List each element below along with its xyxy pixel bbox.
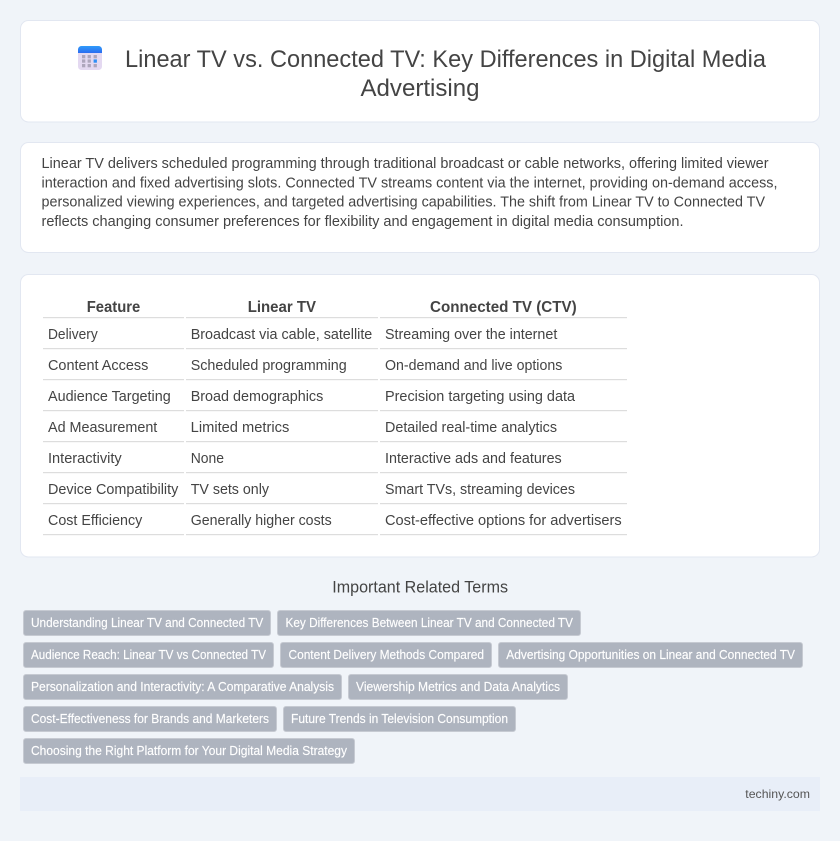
table row: delivery (48, 327, 557, 343)
table header: Feature (87, 299, 140, 316)
text block: introduction paragraph: interaction and fixed advertising slots. Connected TV streams content via the internet, providing on-demand access, (42, 175, 778, 191)
footer: techiny.com (745, 787, 810, 801)
text block: introduction paragraph (42, 156, 778, 230)
table header (87, 299, 577, 316)
tag: choosing platform: Choosing the Right Platform for Your Digital Media Strategy (31, 744, 348, 758)
tag: cost-effectiveness (24, 706, 276, 732)
table row: interactivity (48, 451, 562, 467)
title: Linear TV vs. Connected TV: Key Differences in Digital Media (125, 46, 766, 73)
text block: introduction paragraph: reflects changing consumer preferences for flexibility and engagement in digital media consumption. (42, 214, 684, 230)
tag: key differences (278, 610, 580, 636)
table row: cost efficiency: Generally higher costs (191, 513, 332, 529)
table row: content access: Content Access (48, 358, 148, 374)
icon: calendar (78, 46, 102, 70)
table row: ad measurement: Detailed real-time analytics (385, 420, 557, 436)
table row: interactivity: None (191, 451, 224, 467)
table row: content access (48, 358, 562, 374)
tag: audience reach (24, 642, 274, 668)
tag: choosing platform (24, 738, 354, 764)
tag: understanding (24, 610, 270, 636)
table header: Connected TV (CTV) (430, 299, 577, 316)
table row: interactivity: Interactivity (48, 451, 123, 467)
tag: personalization: Personalization and Interactivity: A Comparative Analysis (31, 680, 334, 694)
table row: device compatibility: Device Compatibility (48, 482, 179, 498)
footer (20, 777, 820, 811)
table header: Linear TV (248, 299, 316, 316)
tag: audience reach: Audience Reach: Linear TV vs Connected TV (31, 648, 267, 662)
table row: cost efficiency (48, 513, 622, 529)
tag: personalization (24, 674, 342, 700)
table row: audience targeting: Audience Targeting (48, 389, 171, 405)
tag: viewership metrics (348, 674, 568, 700)
tag: content delivery: Content Delivery Methods Compared (288, 648, 484, 662)
table row: audience targeting (48, 389, 575, 405)
table row: content access: Scheduled programming (191, 358, 347, 374)
table row: device compatibility: Smart TVs, streaming devices (385, 482, 575, 498)
tag: advertising opportunities (498, 642, 802, 668)
table row: device compatibility (48, 482, 575, 498)
table row: content access: On-demand and live options (385, 358, 562, 374)
text block: introduction paragraph: Linear TV delivers scheduled programming through traditional broadcast or cable networks, offering limited viewer (42, 156, 769, 172)
table row: cost efficiency: Cost-effective options for advertisers (385, 513, 622, 529)
table row: cost efficiency: Cost Efficiency (48, 513, 143, 529)
table row: interactivity: Interactive ads and features (385, 451, 562, 467)
title: Advertising (360, 75, 480, 102)
panel: introduction (20, 142, 820, 252)
title (125, 46, 766, 102)
table row: audience targeting: Broad demographics (191, 389, 323, 405)
panel: title card (20, 20, 820, 122)
table row: delivery: Streaming over the internet (385, 327, 557, 343)
table row: device compatibility: TV sets only (191, 482, 270, 498)
heading: important related terms: Important Related Terms (332, 578, 508, 596)
tag: advertising opportunities: Advertising Opportunities on Linear and Connected TV (506, 648, 796, 662)
table row: ad measurement (48, 420, 557, 436)
tag: understanding: Understanding Linear TV and Connected TV (31, 616, 264, 630)
tag: cost-effectiveness: Cost-Effectiveness for Brands and Marketers (31, 712, 269, 726)
text block: introduction paragraph: personalized viewing experiences, and targeted advertising capabilities. The shift from Linear TV to Connected TV (42, 195, 765, 211)
tag: future trends (284, 706, 516, 732)
panel: related term tags (24, 610, 802, 764)
table row: delivery: Broadcast via cable, satellite (191, 327, 372, 343)
table row: audience targeting: Precision targeting using data (385, 389, 575, 405)
tag: future trends: Future Trends in Television Consumption (291, 712, 508, 726)
table row: ad measurement: Ad Measurement (48, 420, 157, 436)
tag: content delivery (280, 642, 492, 668)
panel: comparison table (20, 274, 820, 557)
table row: delivery: Delivery (48, 327, 98, 343)
table row: ad measurement: Limited metrics (191, 420, 289, 436)
tag: key differences: Key Differences Between Linear TV and Connected TV (286, 616, 574, 630)
tag: viewership metrics: Viewership Metrics and Data Analytics (356, 680, 560, 694)
